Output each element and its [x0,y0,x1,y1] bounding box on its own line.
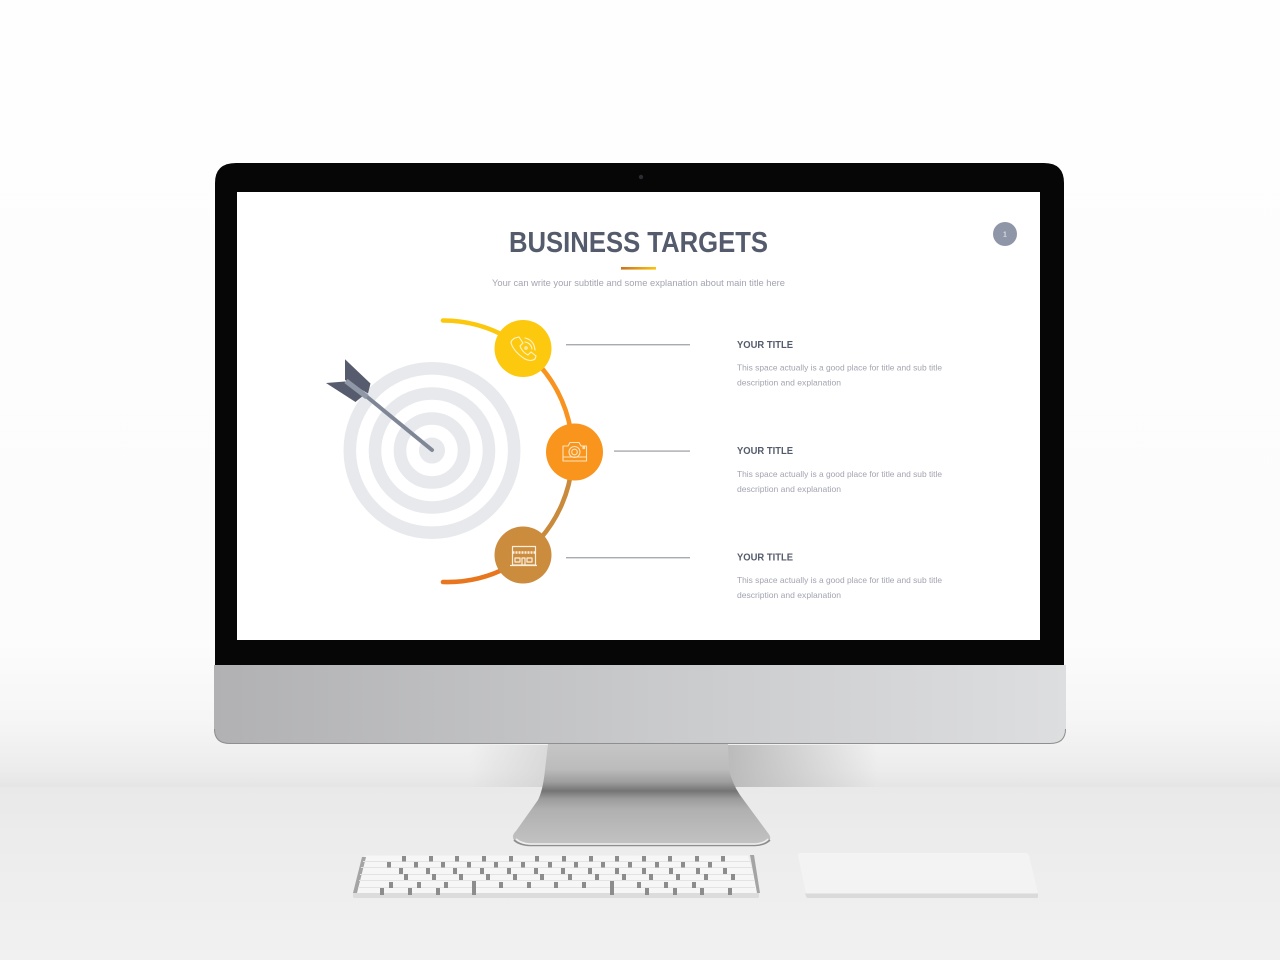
arrow lower feather [326,382,364,402]
curved segment: orange [540,366,572,440]
text block 3: This space actually is a good place for title and sub title [737,576,942,585]
arrow [326,359,432,450]
target rings [350,368,514,533]
icon: shop [510,546,537,566]
key row seams [358,861,755,888]
title: BUSINESS TARGETS [509,227,768,259]
subtitle: Your can write your subtitle and some explanation about main title here [492,278,785,289]
arrow upper feather [345,359,370,394]
curved segment: tan [540,465,572,539]
webcam [639,175,643,179]
page number badge: 1 [1003,232,1007,238]
monitor [214,163,1066,744]
text block 2: This space actually is a good place for title and sub title [737,470,942,479]
trackpad [798,853,1038,898]
text block 2: YOUR TITLE [737,446,793,457]
trackpad front lip [805,894,1038,898]
node 2: camera [546,424,603,480]
title underline [621,267,656,270]
curved segment: yellow [443,320,510,339]
arrow nock [346,381,367,397]
keyboard body [353,856,759,898]
text block 2: description and explanation [737,485,841,494]
node 3: shop [494,526,552,584]
text block 3 [737,553,942,600]
node 1: phone [494,320,552,377]
text block 1: description and explanation [737,379,841,388]
keyboard left and right edges [353,855,760,893]
arrow shaft [366,396,432,450]
curved segment: deep orange [443,566,510,582]
connector line 3 [566,557,690,558]
text block 1: This space actually is a good place for title and sub title [737,364,942,373]
screen [237,192,1040,640]
wall shadow right of stand [728,745,878,787]
keyboard front lip [353,893,759,898]
key gaps [380,856,735,895]
text block 3: YOUR TITLE [737,553,793,564]
wall shadow left of stand [470,745,548,787]
icon: camera [563,442,586,461]
stand base lip [514,839,770,846]
trackpad surface [798,853,1038,898]
chin bottom edge [214,729,1066,744]
desk surface [0,787,1280,960]
monitor chin [214,665,1066,744]
page number badge [993,222,1017,246]
monitor bezel [215,163,1064,666]
text block 2 [737,446,942,494]
text block 1: YOUR TITLE [737,340,793,351]
monitor stand [513,744,770,844]
text block 3: description and explanation [737,591,841,600]
icon: phone [511,337,536,360]
text block 1 [737,340,942,388]
connector line 2 [614,450,690,452]
keyboard [353,855,760,898]
connector line 1 [566,344,690,345]
